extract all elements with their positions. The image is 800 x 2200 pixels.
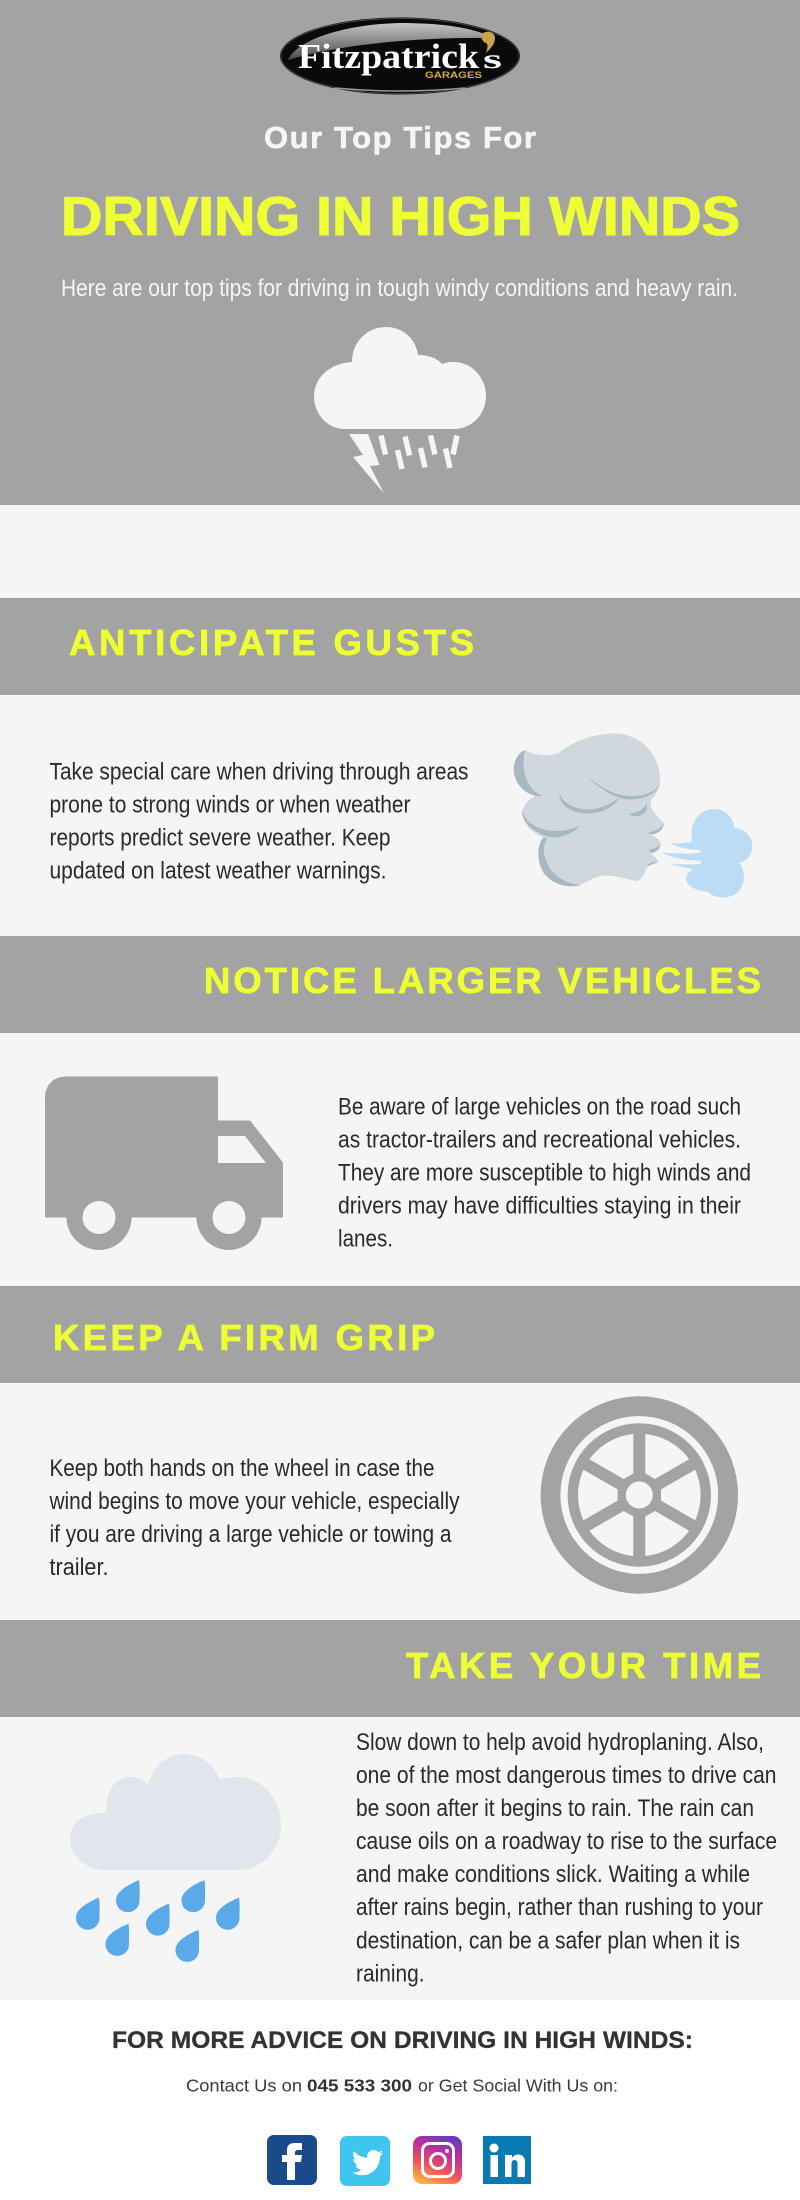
heading: KEEP A FIRM GRIP <box>53 1317 435 1358</box>
body text <box>338 1094 751 1252</box>
body text <box>50 758 468 884</box>
body text: reports predict severe weather. Keep <box>50 824 390 852</box>
body text: drivers may have difficulties staying in their <box>338 1192 741 1220</box>
section band <box>0 936 800 1033</box>
icon: linkedin <box>483 2136 531 2184</box>
icon: facebook <box>267 2135 317 2185</box>
heading: ANTICIPATE GUSTS <box>69 622 474 663</box>
icon: wheel <box>550 1406 728 1584</box>
body text: Take special care when driving through areas <box>50 758 468 786</box>
body text: lanes. <box>338 1226 393 1252</box>
footer heading: FOR MORE ADVICE ON DRIVING IN HIGH WINDS: <box>112 2027 693 2054</box>
body text: wind begins to move your vehicle, especially <box>49 1488 460 1515</box>
panel: keep a firm grip <box>0 1286 800 1584</box>
panel: footer <box>0 2000 800 2200</box>
body text: be soon after it begins to rain. The rain can <box>356 1795 754 1822</box>
body text <box>356 1729 777 1988</box>
panel: notice larger vehicles <box>0 936 800 1252</box>
body text: updated on latest weather warnings. <box>50 858 386 884</box>
section band <box>0 1286 800 1383</box>
logo: Fitzpatrick's Garages <box>280 18 520 94</box>
logo: Fitzpatrick's Garages: s <box>483 44 502 74</box>
panel: anticipate gusts <box>0 598 800 897</box>
section band <box>0 1620 800 1717</box>
body text: raining. <box>356 1960 424 1988</box>
logo: Fitzpatrick's Garages: GARAGES <box>425 70 482 81</box>
heading: NOTICE LARGER VEHICLES <box>204 960 761 1001</box>
body text: trailer. <box>50 1554 108 1581</box>
eyebrow heading: Our Top Tips For <box>264 120 536 155</box>
body text: Be aware of large vehicles on the road such <box>338 1094 741 1120</box>
wind puff <box>662 809 752 897</box>
contact line: or Get Social With Us on: <box>418 2076 618 2096</box>
contact line: Contact Us on <box>186 2076 302 2096</box>
body text: if you are driving a large vehicle or towing a <box>50 1521 452 1548</box>
body text: and make conditions slick. Waiting a while <box>356 1861 750 1888</box>
icon: truck <box>45 1076 283 1250</box>
icon: instagram <box>413 2136 462 2184</box>
contact line <box>186 2076 618 2096</box>
icon: rain cloud <box>70 1754 281 1962</box>
body text: as tractor-trailers and recreational vehicles. <box>338 1126 741 1154</box>
body text: destination, can be a safer plan when it is <box>356 1928 740 1954</box>
section band <box>0 598 800 695</box>
icon: storm cloud with lightning and rain <box>314 327 486 494</box>
panel: take your time <box>0 1620 800 1988</box>
main title: DRIVING IN HIGH WINDS <box>61 186 740 247</box>
heading: TAKE YOUR TIME <box>406 1645 761 1686</box>
icon: twitter <box>340 2136 390 2186</box>
logo: Fitzpatrick's Garages: Fitzpatrick <box>298 37 480 76</box>
body text: They are more susceptible to high winds and <box>338 1160 751 1186</box>
contact line: 045 533 300 <box>307 2076 412 2096</box>
icon: face blowing wind <box>514 733 752 897</box>
body text: Keep both hands on the wheel in case the <box>50 1455 434 1482</box>
body text: prone to strong winds or when weather <box>50 792 410 818</box>
panel: header <box>0 0 800 505</box>
body text <box>49 1455 460 1581</box>
